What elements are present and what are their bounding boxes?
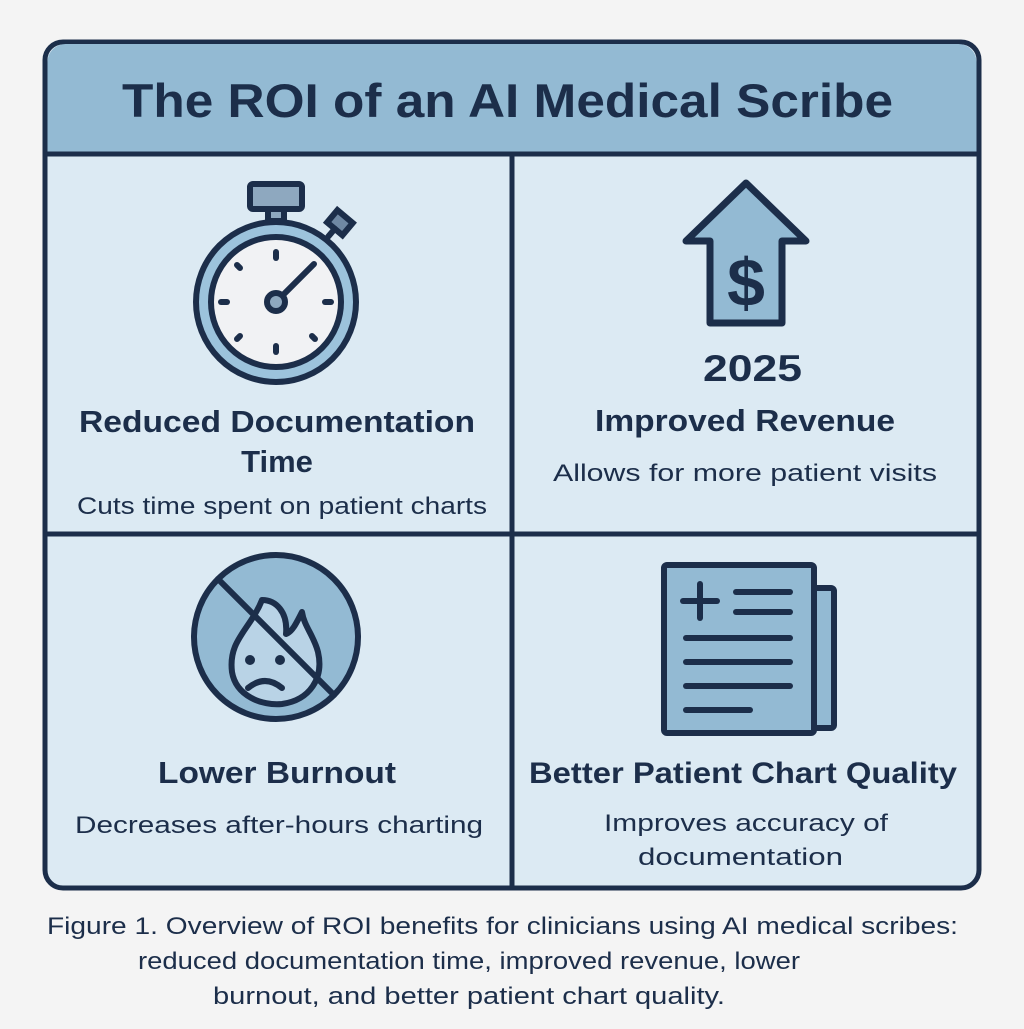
heading: Better Patient Chart Quality — [529, 757, 957, 790]
panel: better patient chart quality: documentation — [638, 844, 843, 871]
title: The ROI of an AI Medical Scribe — [122, 74, 893, 127]
icon: stopwatch — [196, 184, 356, 382]
heading: Improved Revenue — [595, 403, 895, 438]
panel: improved revenue — [553, 183, 937, 487]
caption: reduced documentation time, improved revenue, lower — [138, 948, 800, 975]
text block: Decreases after-hours charting — [75, 812, 483, 839]
text block: Cuts time spent on patient charts — [77, 493, 487, 520]
text block: Improves accuracy of — [604, 810, 888, 837]
heading: Reduced Documentation — [79, 404, 475, 439]
icon: dollar up arrow — [686, 183, 806, 323]
heading: Lower Burnout — [158, 755, 396, 790]
icon: dollar up arrow: $ — [727, 245, 765, 321]
text block: Allows for more patient visits — [553, 460, 937, 487]
caption — [47, 913, 958, 1010]
panel: better patient chart quality — [529, 565, 957, 871]
caption: burnout, and better patient chart quality. — [213, 983, 725, 1010]
panel: reduced documentation time — [77, 184, 487, 520]
panel: reduced documentation time: Time — [241, 444, 313, 479]
panel frame — [45, 42, 979, 888]
icon: no burnout — [194, 555, 358, 719]
caption: Figure 1. Overview of ROI benefits for clinicians using AI medical scribes: — [47, 913, 958, 940]
icon: document — [664, 565, 834, 733]
number: 2025: 2025 — [703, 348, 802, 389]
panel: lower burnout — [75, 555, 483, 839]
